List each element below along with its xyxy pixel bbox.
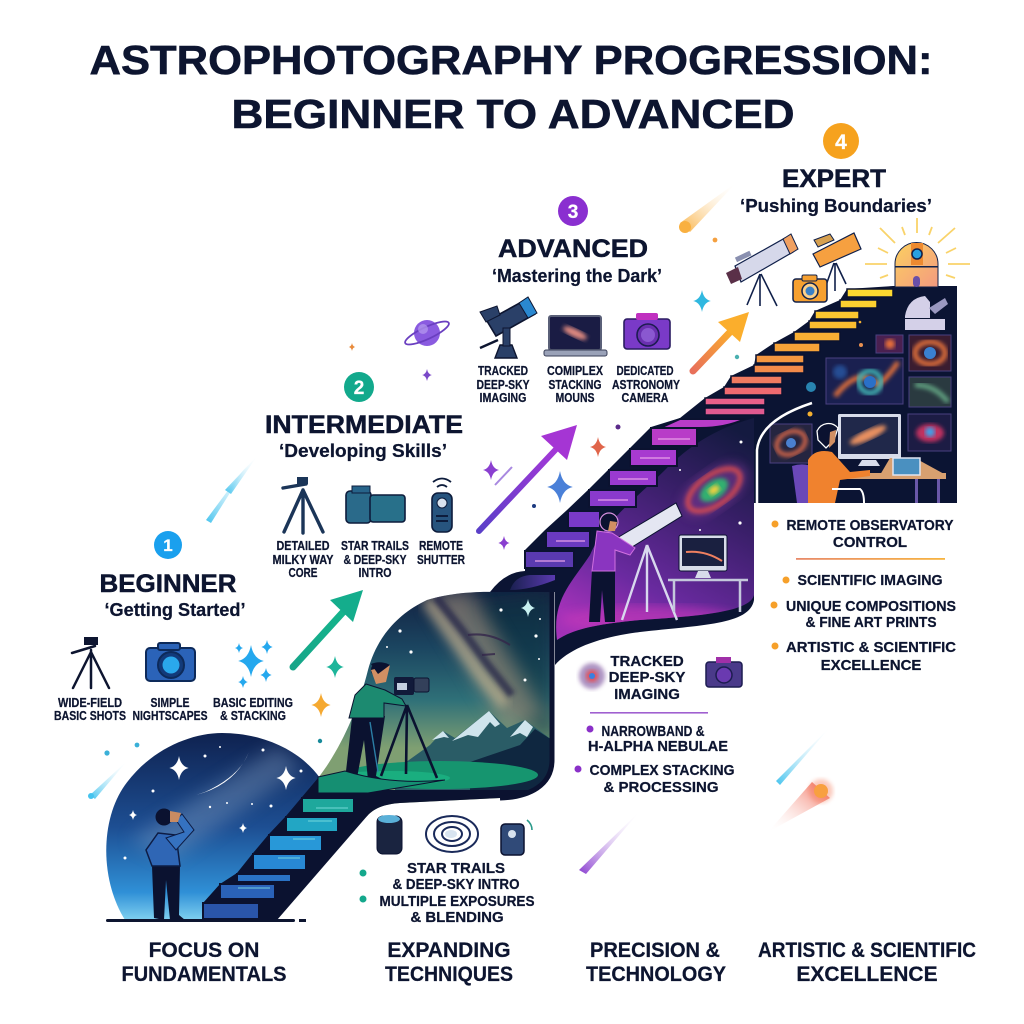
beginner icons and labels: WIDE-FIELD [58,696,122,710]
advanced icons and labels: DEEP-SKY [476,378,530,392]
text block: expert bullets: UNIQUE COMPOSITIONS [786,598,956,615]
expert header: EXPERT [782,165,886,193]
bottom captions: FUNDAMENTALS [122,963,286,986]
title: ASTROPHOTOGRAPHY PROGRESSION: [90,37,932,83]
panel: expert control room [757,296,951,503]
bottom captions: ARTISTIC & SCIENTIFIC [758,939,976,962]
stairs: beginner to intermediate [203,771,445,920]
intermediate header [265,372,463,461]
beginner header [100,531,246,620]
icon: expert telescopes and camera [726,233,861,306]
title [90,37,932,137]
stairs: advanced to expert [705,289,893,415]
advanced header: 3 [568,202,578,223]
intermediate icons and labels: CORE [288,566,318,580]
beginner header: BEGINNER [100,570,236,598]
text block: advanced bullets and icons: H-ALPHA NEBULAE [588,738,728,755]
text block: intermediate bullets and icons: & BLENDING [410,909,504,926]
intermediate icons and labels: STAR TRAILS [341,539,409,553]
beginner header: ‘Getting Started’ [104,599,246,620]
stairs: intermediate to advanced [525,419,745,568]
text block: advanced bullets and icons: COMPLEX STACKING [590,762,734,779]
text block: advanced bullets and icons: TRACKED [610,653,684,670]
bottom captions: PRECISION & [590,939,720,962]
intermediate icons and labels: MILKY WAY [272,553,334,567]
figure: beginner looking up [146,808,194,920]
advanced header: ADVANCED [498,235,648,263]
figure: astronomer with telescope and desk [589,503,748,622]
bottom captions: FOCUS ON [149,939,259,962]
expert header: 4 [835,131,847,154]
text block: expert bullets: EXCELLENCE [821,657,921,674]
advanced header [492,196,662,286]
intermediate icons and labels: DETAILED [276,539,330,553]
meteors and decorative planet [88,182,833,874]
icon: observatory dome with rays [865,218,970,287]
intermediate header: 2 [354,378,364,399]
panel: advanced dark staircase and purple observatory [490,286,957,665]
intermediate icons and labels [272,477,465,580]
advanced icons and labels: TRACKED [478,364,528,378]
beginner header: 1 [163,536,173,555]
intermediate icons and labels: & DEEP-SKY [344,553,407,567]
advanced icons and labels [476,297,681,405]
text block: expert bullets: CONTROL [833,534,907,551]
intermediate icons and labels: INTRO [358,566,392,580]
text block: advanced bullets and icons [574,653,742,796]
advanced icons and labels: MOUNS [556,391,594,405]
text block: intermediate bullets and icons: STAR TRAILS [407,860,505,877]
expert header: ‘Pushing Boundaries’ [740,195,932,216]
beginner icons and labels: & STACKING [220,709,286,723]
beginner icons and labels: NIGHTSCAPES [132,709,208,723]
bottom captions: EXPANDING [387,939,511,962]
title: BEGINNER TO ADVANCED [232,91,794,137]
panel: beginner night sky [106,733,320,922]
advanced header: ‘Mastering the Dark’ [492,265,662,286]
beginner icons and labels: SIMPLE [150,696,190,710]
advanced icons and labels: CAMERA [622,391,668,405]
text block: intermediate bullets and icons: & DEEP-SKY INTRO [392,876,520,893]
intermediate header: INTERMEDIATE [265,411,463,439]
text block: intermediate bullets and icons [360,815,534,926]
text block: expert bullets [770,517,956,674]
figure: photographer with tripod [345,662,437,780]
beginner icons and labels: BASIC EDITING [213,696,293,710]
advanced icons and labels: DEDICATED [616,364,674,378]
advanced icons and labels: COMIPLEX [547,364,604,378]
advanced icons and labels: IMAGING [480,391,526,405]
text block: intermediate bullets and icons: MULTIPLE EXPOSURES [380,893,534,910]
intermediate icons and labels: REMOTE [419,539,463,553]
advanced icons and labels: ASTRONOMY [612,378,681,392]
bottom captions: EXCELLENCE [796,963,938,986]
text block: expert bullets: & FINE ART PRINTS [806,614,936,631]
text block: advanced bullets and icons: IMAGING [614,686,680,703]
text block: advanced bullets and icons: DEEP-SKY [609,669,685,686]
text block: advanced bullets and icons: & PROCESSING [603,779,719,796]
text block: expert bullets: SCIENTIFIC IMAGING [798,572,942,589]
advanced icons and labels: STACKING [548,378,602,392]
text block: expert bullets: ARTISTIC & SCIENTIFIC [786,639,956,656]
beginner icons and labels: BASIC SHOTS [54,709,126,723]
bottom captions [122,939,976,986]
arrows between levels [293,312,749,667]
bottom captions: TECHNOLOGY [586,963,726,986]
beginner icons and labels [54,637,293,723]
text block: expert bullets: REMOTE OBSERVATORY [786,517,954,534]
text block: advanced bullets and icons: NARROWBAND & [602,723,705,740]
bottom captions: TECHNIQUES [385,963,513,986]
expert header [740,123,932,216]
intermediate header: ‘Developing Skills’ [279,440,447,461]
panel: intermediate milky way scene [319,592,554,817]
intermediate icons and labels: SHUTTER [417,553,465,567]
